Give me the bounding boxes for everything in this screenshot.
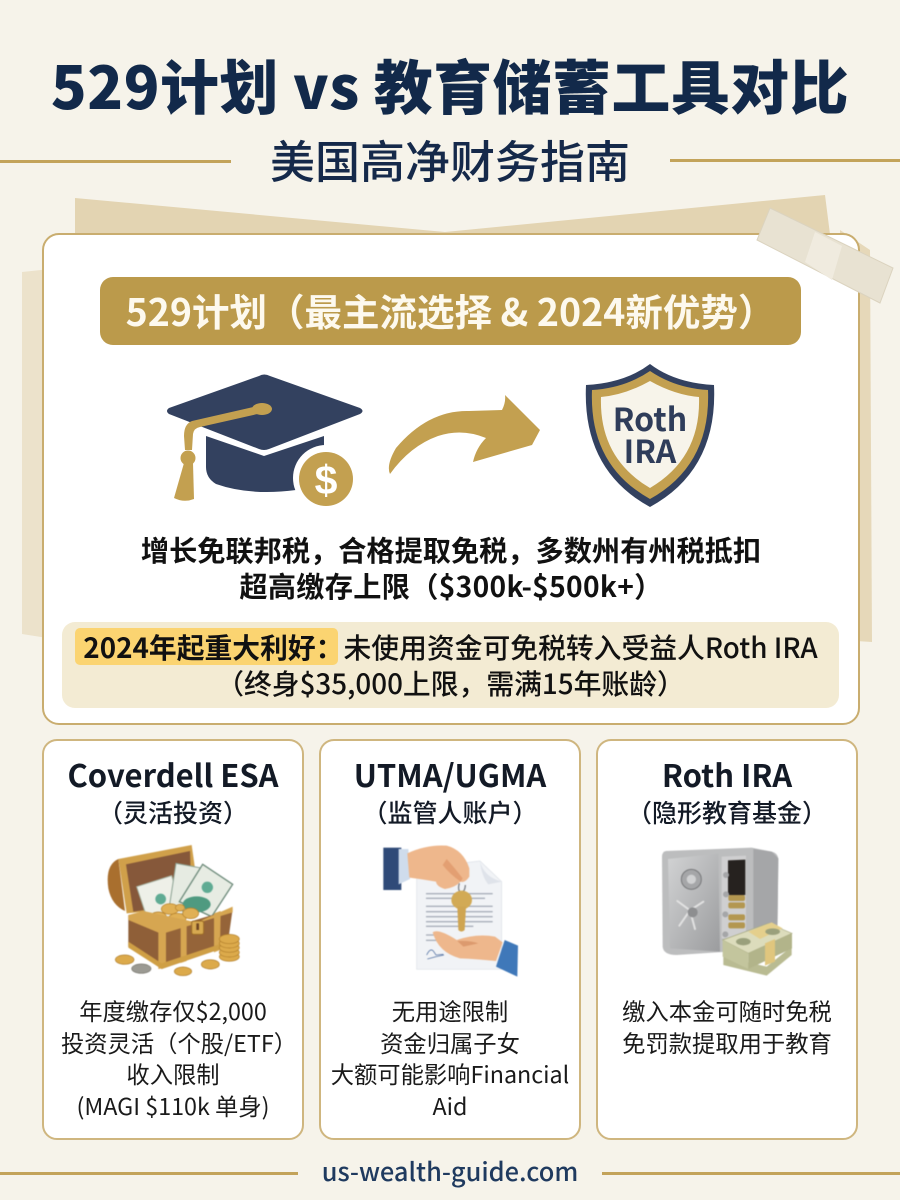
card subtitle: （监管人账户）	[362, 794, 538, 830]
decorative tape	[756, 208, 894, 304]
icon: Roth IRA shield: Roth	[613, 395, 687, 441]
panel: Roth IRA	[596, 739, 858, 1140]
card body: 缴入本金可随时免税	[622, 993, 832, 1027]
card body	[61, 993, 297, 1122]
decorative paper behind main panel	[22, 195, 872, 642]
arrow	[388, 395, 540, 474]
icon: hands passing key over document	[382, 844, 519, 977]
icon: graduation cap with dollar coin	[167, 374, 362, 506]
callout: 2024 benefit	[62, 622, 839, 708]
icon: safe with cash	[662, 847, 793, 976]
panel: 529 plan	[42, 233, 860, 725]
card body: Aid	[432, 1088, 468, 1122]
card body: 无用途限制	[392, 993, 508, 1027]
benefit text: 超高缴存上限（$300k-$500k+）	[239, 565, 663, 606]
footer: us-wealth-guide.com	[322, 1153, 578, 1189]
subtitle with rules: 美国高净财务指南	[270, 126, 630, 191]
card body	[331, 993, 569, 1122]
card body: 年度缴存仅$2,000	[79, 993, 267, 1027]
benefit text	[141, 529, 761, 606]
panel heading: 529 plan: 529计划（最主流选择 & 2024新优势）	[126, 282, 775, 337]
card body	[622, 993, 832, 1058]
card body: 大额可能影响Financial	[331, 1056, 569, 1090]
card subtitle: （灵活投资）	[98, 794, 248, 830]
card body: (MAGI $110k 单身)	[76, 1088, 270, 1122]
icon: graduation cap with dollar coin: $	[315, 457, 338, 503]
icon: treasure chest	[106, 844, 240, 977]
card body: 收入限制	[126, 1056, 220, 1090]
callout: 2024 benefit: （终身$35,000上限，需满15年账龄）	[216, 663, 685, 703]
card title: Roth IRA	[662, 751, 792, 796]
card body: 免罚款提取用于教育	[622, 1024, 832, 1058]
icon: Roth IRA shield	[586, 364, 714, 507]
icon: Roth IRA shield: IRA	[624, 427, 677, 473]
card body: 资金归属子女	[380, 1024, 520, 1058]
highlight marker	[75, 628, 338, 665]
subtitle with rules	[0, 126, 900, 191]
callout: 2024 benefit: 2024年起重大利好：未使用资金可免税转入受益人Roth IRA	[83, 627, 818, 667]
panel: UTMA/UGMA	[319, 739, 581, 1140]
footer	[0, 1153, 900, 1189]
panel: Coverdell ESA	[42, 739, 304, 1140]
benefit text: 增长免联邦税，合格提取免税，多数州有州税抵扣	[141, 529, 761, 570]
card body: 投资灵活（个股/ETF）	[61, 1024, 297, 1058]
card subtitle: （隐形教育基金）	[627, 794, 827, 830]
card title: UTMA/UGMA	[354, 751, 546, 796]
card title: Coverdell ESA	[67, 751, 279, 796]
title: 529计划 vs 教育储蓄工具对比	[51, 41, 849, 126]
